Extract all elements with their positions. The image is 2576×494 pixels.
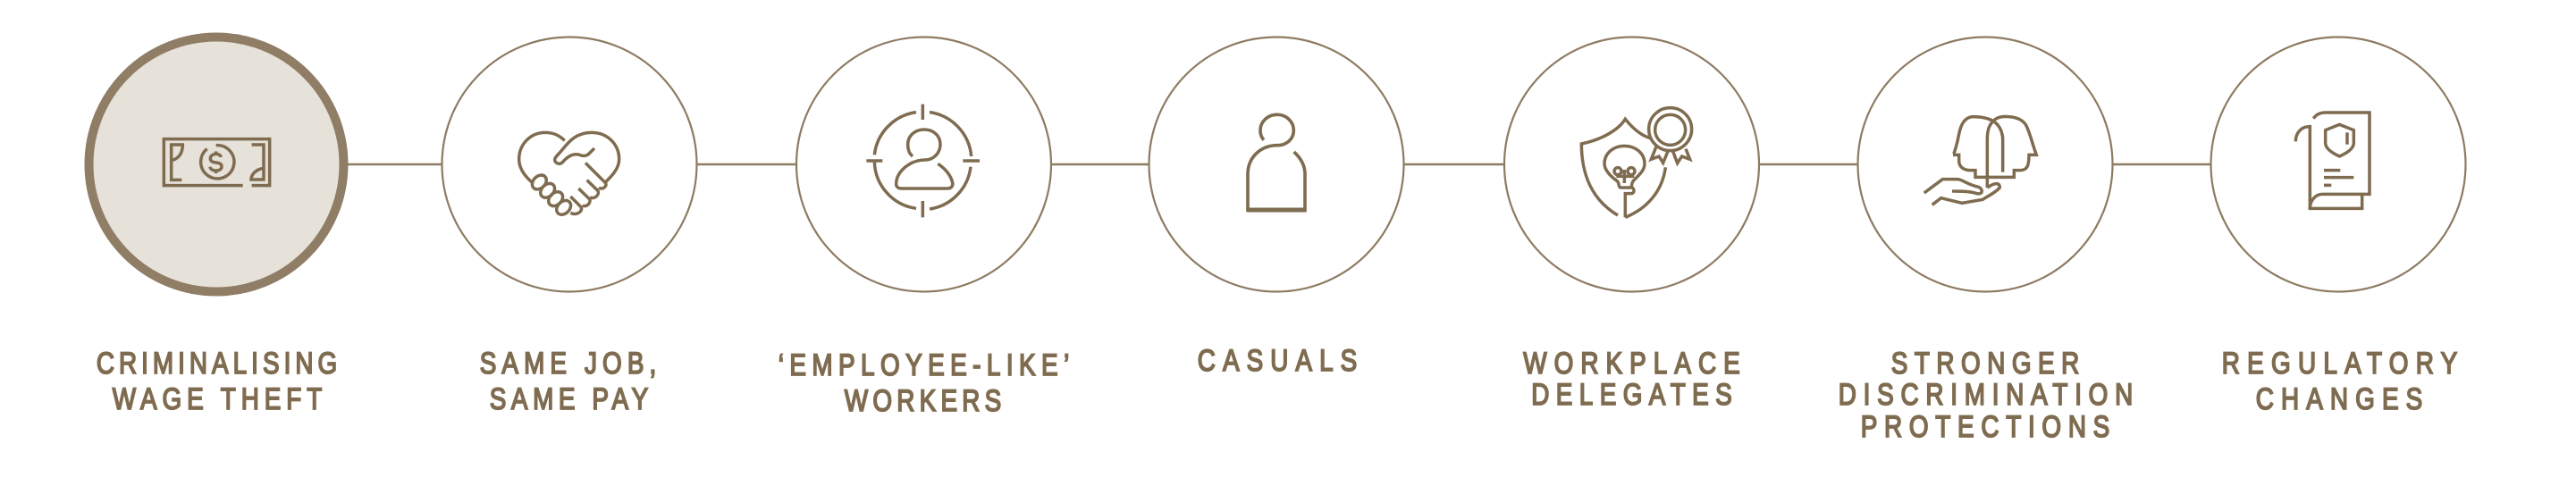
label: CRIMINALISING	[97, 346, 337, 381]
label: SAME PAY	[490, 381, 649, 416]
connector 5	[1759, 163, 1858, 165]
label	[1839, 346, 2133, 444]
step: casuals	[1149, 38, 1403, 378]
circle	[796, 38, 1051, 291]
circle	[1504, 38, 1759, 291]
icon: document with shield	[2295, 113, 2370, 208]
connector 3	[1051, 163, 1149, 165]
icon: person	[1247, 114, 1306, 210]
circle	[442, 38, 697, 291]
label: STRONGER	[1891, 346, 2079, 381]
icon: shield, bulb and rosette	[1581, 108, 1692, 217]
label: WORKERS	[845, 383, 1001, 418]
connector 6	[2113, 163, 2211, 165]
label: WAGE THEFT	[113, 381, 322, 416]
label: DISCRIMINATION	[1839, 377, 2133, 412]
label: SAME JOB,	[480, 346, 656, 381]
connector 1	[347, 163, 442, 165]
icon: banknote	[164, 139, 270, 186]
label	[779, 347, 1069, 418]
label: DELEGATES	[1531, 377, 1732, 412]
label	[97, 346, 337, 416]
connector 2	[696, 163, 796, 165]
label: CASUALS	[1198, 343, 1357, 378]
label: CHANGES	[2256, 381, 2422, 416]
step: stronger discrimination protections	[1839, 38, 2133, 444]
label	[2222, 346, 2458, 416]
circle	[2211, 38, 2465, 291]
circle	[1857, 38, 2113, 291]
step: employee-like workers	[779, 38, 1069, 418]
step: same job, same pay	[442, 38, 697, 416]
icon: person in target	[866, 105, 980, 217]
label: ‘EMPLOYEE-LIKE’	[779, 347, 1069, 382]
step: workplace delegates	[1504, 38, 1759, 412]
label	[1523, 346, 1740, 412]
icon: handshake heart	[519, 132, 619, 217]
circle	[1149, 38, 1403, 291]
step: criminalising wage theft	[89, 38, 343, 416]
label: WORKPLACE	[1523, 346, 1740, 381]
label	[480, 346, 656, 416]
label: REGULATORY	[2222, 346, 2458, 381]
label: PROTECTIONS	[1861, 409, 2109, 444]
icon: two heads on a hand	[1924, 117, 2036, 205]
highlighted circle	[89, 38, 343, 291]
connector 4	[1403, 163, 1504, 165]
step: regulatory changes	[2211, 38, 2465, 416]
